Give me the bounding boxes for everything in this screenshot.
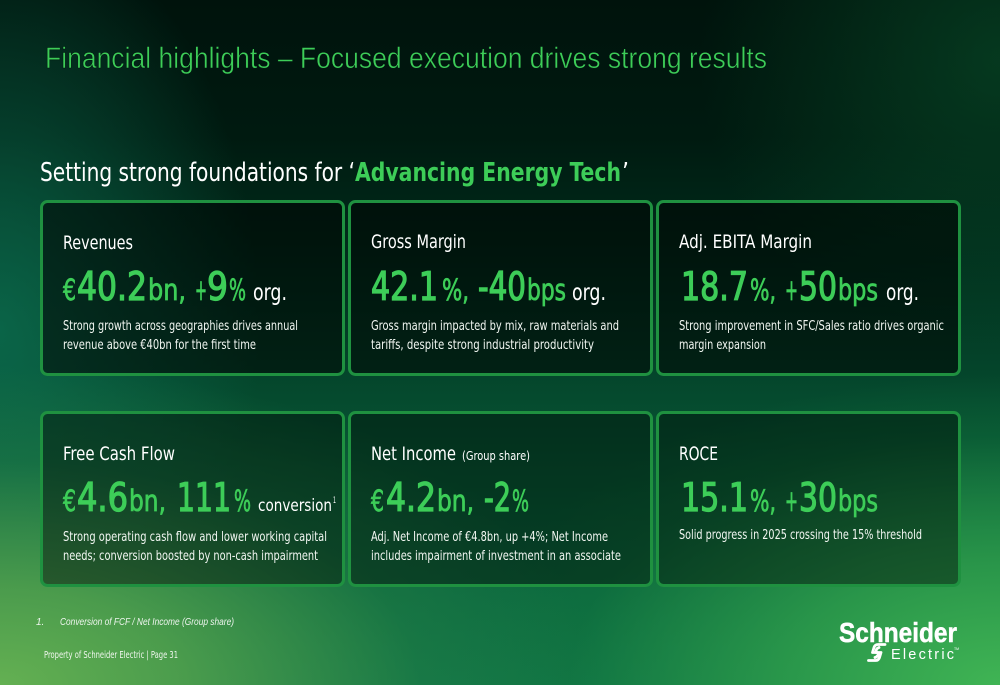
logo: schneider electric: Schneider xyxy=(839,617,957,648)
stat: net income: % xyxy=(512,484,529,518)
stat: revenues: 9 xyxy=(207,265,228,310)
subtitle xyxy=(40,158,629,188)
stat: gross margin: bps xyxy=(527,273,566,307)
description: net income xyxy=(371,529,621,564)
panel: adj. ebita margin xyxy=(658,202,960,374)
stat: free cash flow: € xyxy=(63,484,76,518)
stat: adj. ebita margin: %, xyxy=(750,273,776,307)
description: gross margin: Gross margin impacted by mix, raw materials and xyxy=(371,318,619,334)
stat: adj. ebita margin: org. xyxy=(886,280,919,306)
stat: gross margin: org. xyxy=(572,280,606,306)
heading: net income: (Group share) xyxy=(462,448,530,463)
stat: gross margin: -40 xyxy=(478,265,526,310)
stat: revenues: + xyxy=(195,273,207,307)
stat: roce: %, xyxy=(750,484,776,518)
stat: revenues: 40.2 xyxy=(77,265,147,310)
stat: roce: 30 xyxy=(799,476,837,521)
description: free cash flow: Strong operating cash flow and lower working capital xyxy=(63,529,327,545)
subtitle: Advancing Energy Tech xyxy=(355,158,621,188)
description: adj. ebita margin: margin expansion xyxy=(679,337,766,353)
stat: revenues xyxy=(63,265,287,310)
stat: adj. ebita margin: + xyxy=(785,273,798,307)
logo: schneider electric: Electric xyxy=(891,647,954,663)
stat: adj. ebita margin: bps xyxy=(838,273,878,307)
stat: roce: bps xyxy=(838,484,878,518)
stat: free cash flow xyxy=(63,476,336,521)
stat: net income: € xyxy=(371,484,384,518)
stat: adj. ebita margin: 50 xyxy=(799,265,837,310)
icon: schneider S mark xyxy=(868,644,885,660)
stat: revenues: org. xyxy=(253,280,287,306)
logo: schneider electric xyxy=(839,617,959,663)
stat: gross margin xyxy=(371,265,606,310)
heading: adj. ebita margin: Adj. EBITA Margin xyxy=(679,231,812,253)
heading: net income xyxy=(371,443,530,465)
stat: free cash flow: conversion xyxy=(258,496,332,516)
footer: page label: Property of Schneider Electric | Page 31 xyxy=(44,650,178,661)
description: free cash flow xyxy=(63,529,327,564)
stat: revenues: bn, xyxy=(148,273,186,307)
footnote: 1. xyxy=(36,617,44,628)
panel: revenues xyxy=(42,202,344,374)
description: revenues: Strong growth across geographies drives annual xyxy=(63,318,298,334)
stat: roce xyxy=(681,476,878,521)
panel: roce xyxy=(658,412,960,586)
subtitle: ’ xyxy=(622,158,629,188)
subtitle: Setting strong foundations for ‘ xyxy=(40,158,355,188)
description: net income: includes impairment of investment in an associate xyxy=(371,548,621,564)
stat: roce: 15.1 xyxy=(681,476,748,521)
stat: adj. ebita margin xyxy=(681,265,919,310)
stat: free cash flow: bn, xyxy=(129,484,166,518)
footnote: Conversion of FCF / Net Income (Group share) xyxy=(60,617,234,628)
stat: revenues: % xyxy=(229,273,246,307)
heading: free cash flow: Free Cash Flow xyxy=(63,443,175,465)
heading: net income: Net Income xyxy=(371,443,456,465)
description: gross margin: tariffs, despite strong industrial productivity xyxy=(371,337,594,353)
description: revenues xyxy=(63,318,298,353)
stat: roce: + xyxy=(785,484,798,518)
heading: roce: ROCE xyxy=(679,443,718,465)
description: revenues: revenue above €40bn for the first time xyxy=(63,337,256,353)
stat: net income: -2 xyxy=(484,476,511,521)
panel: free cash flow xyxy=(42,412,344,586)
stat: adj. ebita margin: 18.7 xyxy=(681,265,748,310)
description: adj. ebita margin xyxy=(679,318,944,353)
description: gross margin xyxy=(371,318,619,353)
logo: schneider electric: TM xyxy=(954,647,959,651)
heading: gross margin: Gross Margin xyxy=(371,231,466,253)
heading: revenues: Revenues xyxy=(63,232,133,254)
description: roce: Solid progress in 2025 crossing the 15% threshold xyxy=(679,527,922,543)
stat: net income: 4.2 xyxy=(386,476,436,521)
stat: net income: bn, xyxy=(437,484,474,518)
panel: net income xyxy=(350,412,652,586)
description: adj. ebita margin: Strong improvement in SFC/Sales ratio drives organic xyxy=(679,318,944,334)
description: free cash flow: needs; conversion boosted by non-cash impairment xyxy=(63,548,318,564)
stat: free cash flow: 1 xyxy=(333,496,336,506)
panel: gross margin xyxy=(350,202,652,374)
stat: free cash flow: 4.6 xyxy=(77,476,128,521)
stat: free cash flow: 111 xyxy=(177,476,231,521)
title: Financial highlights – Focused execution drives strong results xyxy=(45,42,767,75)
stat: revenues: € xyxy=(63,273,76,307)
stat: gross margin: %, xyxy=(442,273,469,307)
stat: free cash flow: % xyxy=(234,484,251,518)
stat: net income xyxy=(371,476,529,521)
stat: gross margin: 42.1 xyxy=(371,265,438,310)
description: net income: Adj. Net Income of €4.8bn, up +4%; Net Income xyxy=(371,529,608,545)
